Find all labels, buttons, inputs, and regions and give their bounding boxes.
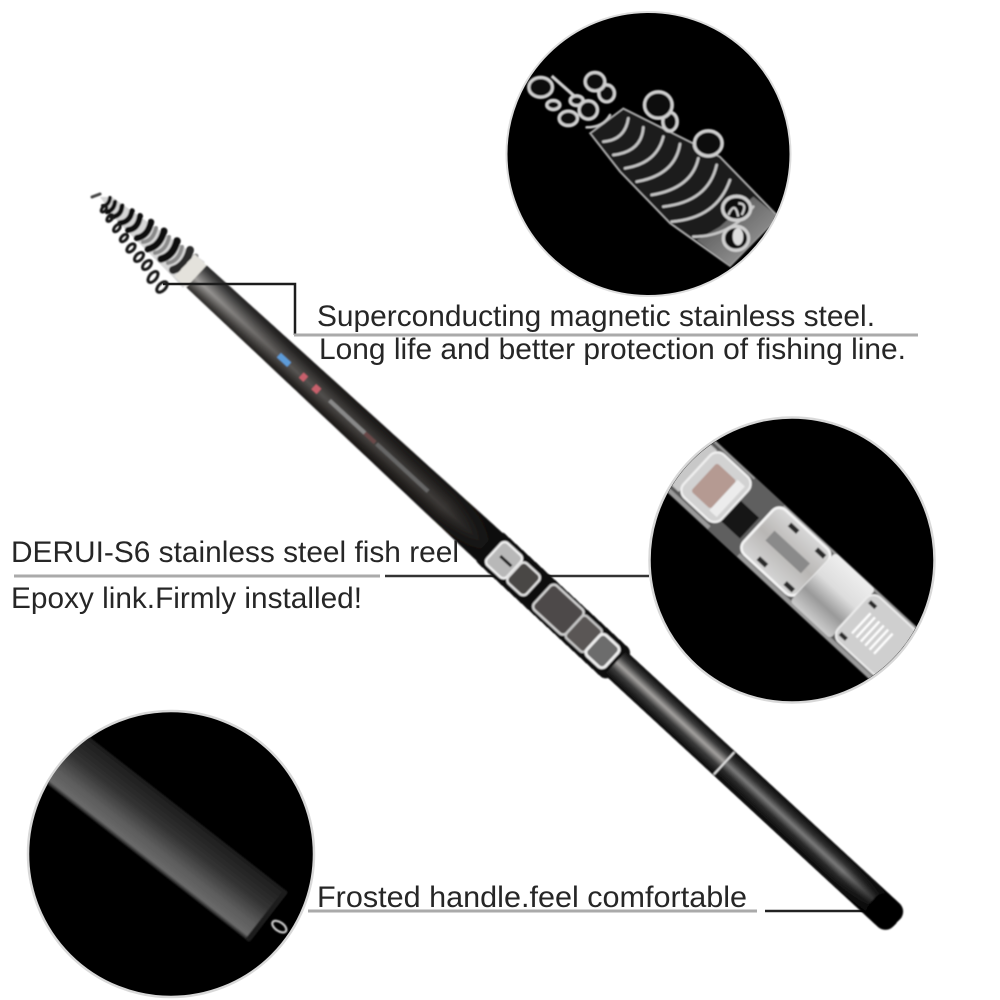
reel seat section xyxy=(472,529,633,682)
circle detail: frosted handle xyxy=(28,711,314,997)
tip section body xyxy=(590,108,778,266)
butt of tip section xyxy=(697,197,778,266)
silver cylinder xyxy=(790,552,876,639)
callout text: guides: Superconducting magnetic stainless steel. xyxy=(317,300,875,333)
threaded lock xyxy=(834,593,916,676)
callout text: reel seat: DERUI-S6 stainless steel fish reel xyxy=(11,536,459,569)
callout text: guides xyxy=(317,300,906,366)
fishing rod xyxy=(92,194,910,937)
line guide rings xyxy=(529,72,751,250)
rod decoration and logo xyxy=(277,352,430,494)
circle detail: reel seat xyxy=(648,416,936,704)
callout text: handle: Frosted handle.feel comfortable xyxy=(317,881,747,914)
leader line: guide callout xyxy=(163,284,918,335)
circle detail: rod tip guides xyxy=(506,12,790,296)
seat body band xyxy=(668,440,916,679)
main seat plate xyxy=(738,504,834,599)
callout text: guides: Long life and better protection of fishing line. xyxy=(319,333,906,366)
hood with pink inlay xyxy=(677,448,755,526)
leader line: reel callout xyxy=(14,574,649,578)
callout text: reel seat: Epoxy link.Firmly installed! xyxy=(11,582,362,615)
rod tip sections xyxy=(92,194,205,288)
end ring xyxy=(270,919,288,935)
leader line: handle callout xyxy=(308,910,866,912)
handle body xyxy=(46,737,288,942)
callout text: reel seat xyxy=(11,536,459,615)
rod line guides xyxy=(100,205,169,294)
silver section rims xyxy=(587,115,753,237)
silver ferrule xyxy=(175,254,207,288)
guide highlights xyxy=(728,203,744,245)
rod body in rod-aligned coordinates xyxy=(171,251,910,937)
carbon blank xyxy=(184,262,502,560)
handle grip xyxy=(605,651,908,934)
